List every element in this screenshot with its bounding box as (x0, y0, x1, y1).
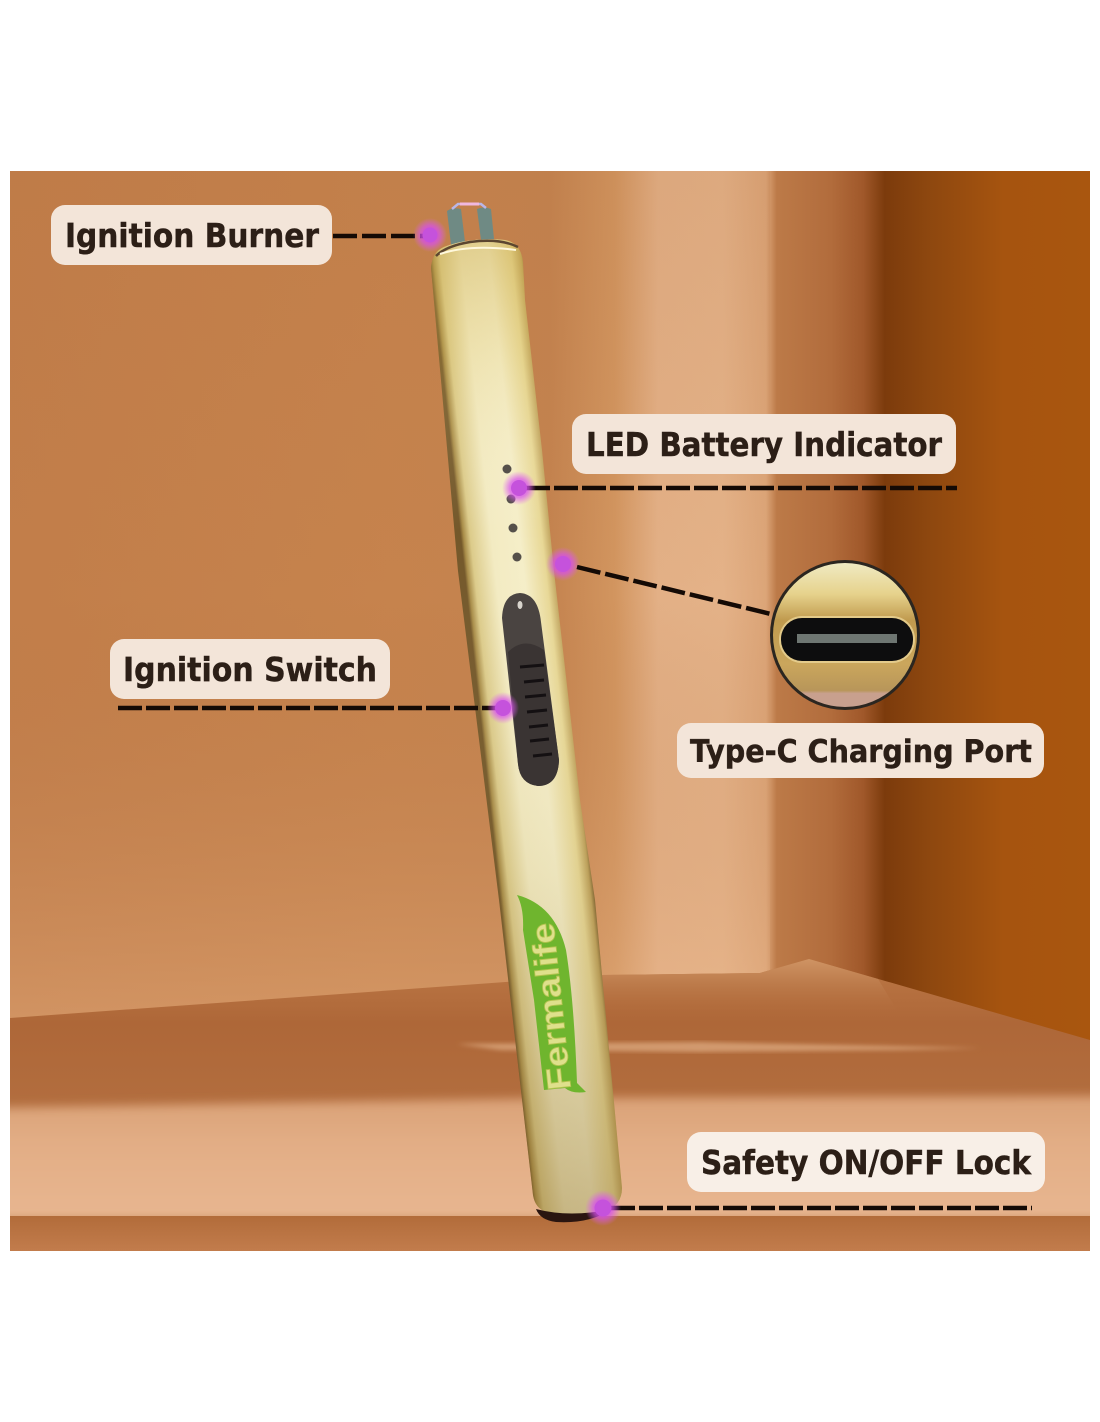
callout: Safety ON/OFF Lock (585, 1132, 1045, 1226)
callout: Ignition Switch (110, 639, 519, 724)
floor (0, 959, 1100, 1251)
infographic: electric lighter features (10, 171, 1090, 1251)
base shadow (536, 1209, 612, 1222)
panel: room background (0, 171, 1100, 1251)
LED indicator dots (502, 464, 522, 562)
callout: LED Battery Indicator: LED Battery Indicator (586, 425, 943, 464)
lighter body (431, 204, 622, 1222)
callout: Type-C Charging Port: Type-C Charging Port (690, 734, 1032, 770)
icon: USB-C port close-up (770, 560, 920, 710)
callout: Ignition Burner: Ignition Burner (65, 216, 320, 255)
callout: Ignition Burner (51, 205, 447, 265)
logo: Fermalife leaf: Fermalife (524, 921, 578, 1092)
callout: Ignition Switch: Ignition Switch (123, 650, 377, 689)
top rim (436, 241, 518, 256)
callout: Type-C Charging Port (546, 547, 1044, 778)
ignition slider switch (502, 593, 559, 786)
callout: Safety ON/OFF Lock: Safety ON/OFF Lock (701, 1143, 1032, 1182)
ignition electrodes (447, 204, 494, 245)
callout: LED Battery Indicator (502, 414, 957, 505)
logo: Fermalife leaf (517, 895, 586, 1092)
barrel (431, 239, 622, 1215)
